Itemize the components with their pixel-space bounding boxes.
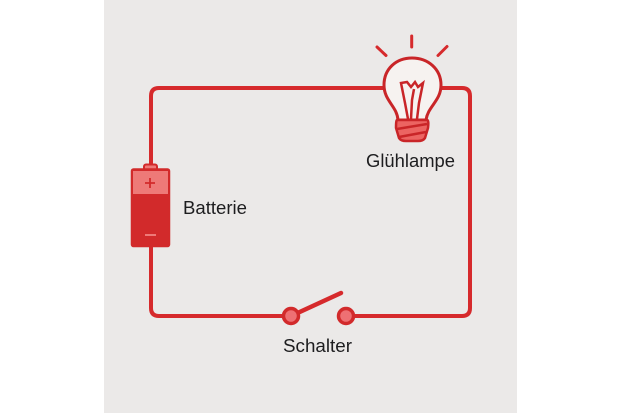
bulb glass (384, 58, 441, 120)
icon: switch (284, 293, 354, 324)
bulb base (396, 120, 428, 141)
icon: bulb rays (377, 36, 447, 56)
wire: circuit loop (151, 88, 470, 316)
bulb filament (401, 82, 423, 119)
label: Batterie: Batterie (183, 198, 247, 218)
panel: background (104, 0, 517, 413)
icon: battery (132, 164, 170, 246)
icon: light bulb (377, 36, 447, 141)
label: Glühlampe: Glühlampe (366, 151, 455, 171)
label: Schalter: Schalter (283, 336, 352, 356)
